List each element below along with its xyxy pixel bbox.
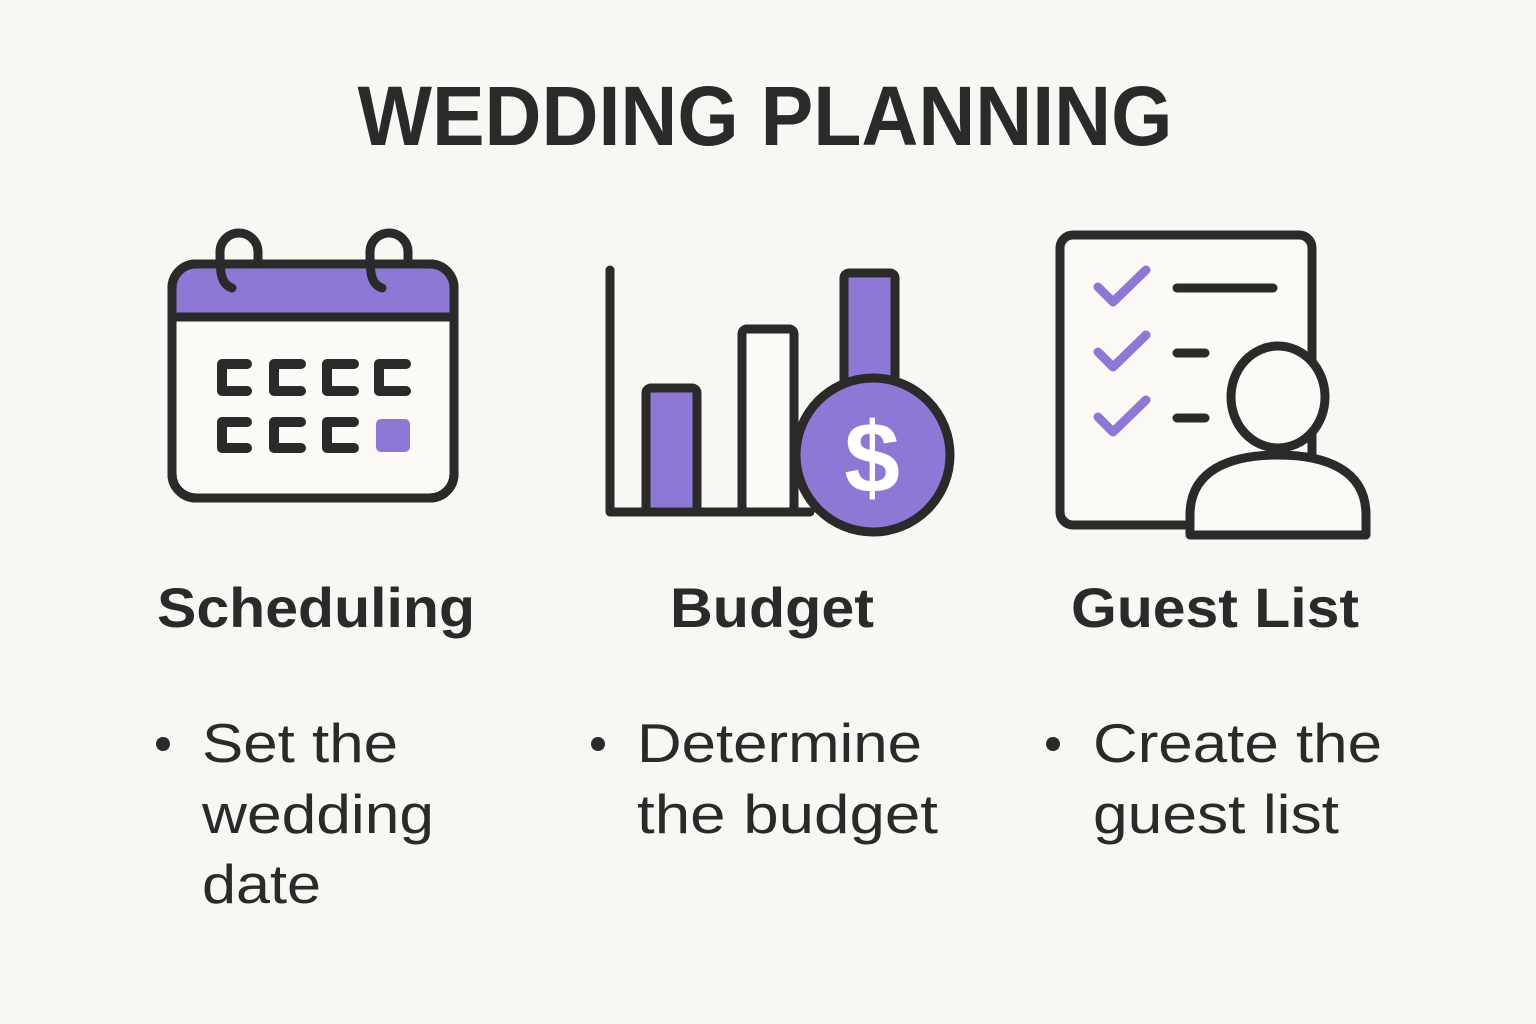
icon: budget chart: $ bbox=[844, 402, 900, 514]
text: budget bullet: the budget bbox=[637, 783, 938, 845]
text: guest list bullet: guest list bbox=[1093, 783, 1339, 845]
text: guest list bullet bbox=[1046, 712, 1382, 845]
text: budget bullet bbox=[591, 712, 938, 845]
text: guest list bullet: Create the bbox=[1093, 712, 1382, 774]
heading: Guest List: Guest List bbox=[1071, 576, 1359, 639]
icon: budget chart bbox=[610, 270, 950, 532]
text: scheduling bullet: wedding bbox=[201, 783, 434, 845]
text: budget bullet: Determine bbox=[637, 712, 922, 774]
icon: guest list bbox=[1060, 235, 1366, 535]
text: scheduling bullet: date bbox=[202, 853, 321, 915]
heading: Budget: Budget bbox=[670, 576, 874, 639]
heading: Scheduling: Scheduling bbox=[157, 576, 475, 639]
title: WEDDING PLANNING bbox=[358, 69, 1172, 163]
text: scheduling bullet bbox=[156, 712, 434, 915]
text: scheduling bullet: Set the bbox=[202, 712, 398, 774]
icon: calendar bbox=[172, 233, 454, 498]
